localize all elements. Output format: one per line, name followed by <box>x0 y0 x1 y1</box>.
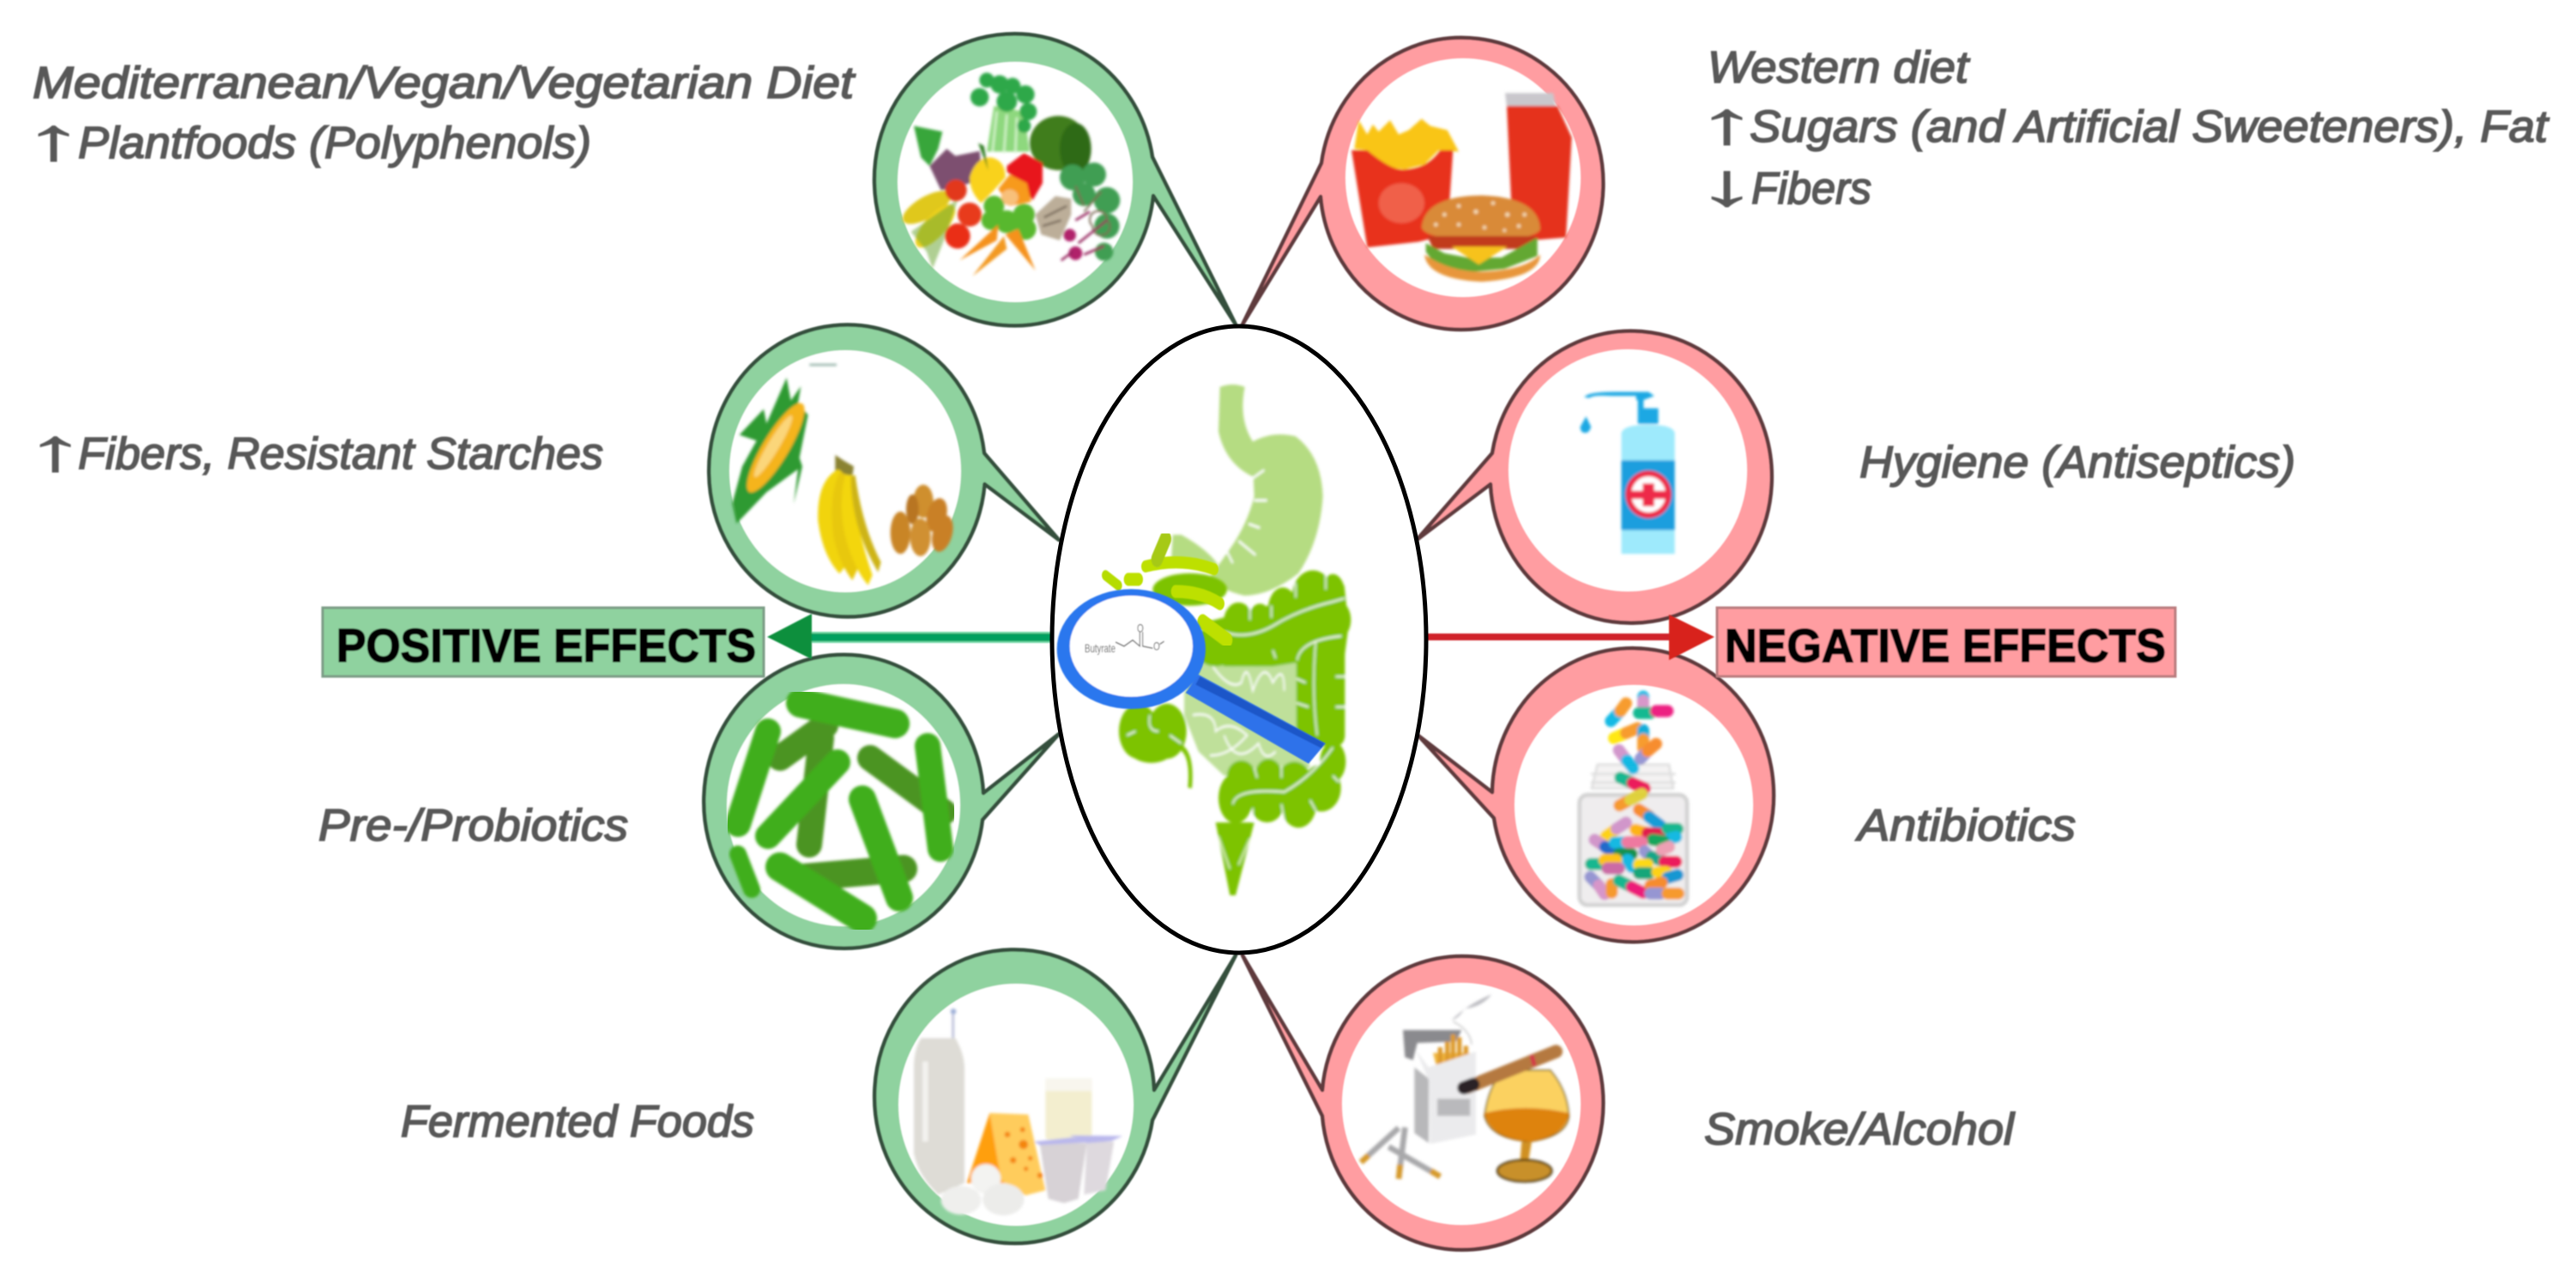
icon: vegetables <box>898 73 1120 276</box>
text: fibers and resistant starches: ↑ <box>24 416 87 483</box>
icon: intestines <box>1119 571 1351 895</box>
molecule: Butyrate <box>1085 641 1116 655</box>
icon: bacteria <box>738 703 944 918</box>
icon: pill bottle <box>1580 697 1687 905</box>
icon: corn, banana, potatoes <box>732 365 957 585</box>
icon: dairy foods <box>914 1009 1122 1215</box>
panel: probiotics callout <box>704 655 1059 949</box>
text: fibers and resistant starches: Fibers, Resistant Starches <box>78 429 603 479</box>
panel: antibiotics callout <box>1418 648 1774 942</box>
label box: negative effects: NEGATIVE EFFECTS <box>1725 619 2166 672</box>
panel: western diet callout <box>1243 38 1603 330</box>
text: western diet: Sugars (and Artificial Sweeteners), Fat <box>1750 102 2550 152</box>
panel: hygiene callout <box>1417 331 1772 623</box>
text: Mediterranean diet: Plantfoods (Polyphenols) <box>78 118 591 168</box>
icon: bacteria on gut <box>1105 539 1227 640</box>
arrow: positive effects <box>767 614 1055 659</box>
panel: smoke and alcohol callout <box>1243 955 1603 1250</box>
text: hygiene: Hygiene (Antiseptics) <box>1859 438 2295 488</box>
molecule: O <box>1137 621 1144 635</box>
panel: fibers callout <box>709 324 1059 616</box>
text: western diet <box>1696 43 2550 218</box>
panel: fermented foods callout <box>874 949 1236 1243</box>
icon: magnifying glass <box>1057 589 1326 764</box>
icon: antiseptic bottle <box>1581 391 1675 554</box>
text: Mediterranean diet <box>22 58 856 173</box>
arrow: negative effects <box>1424 615 1714 660</box>
text: western diet: Fibers <box>1751 164 1872 214</box>
text: antibiotics: Antibiotics <box>1855 801 2076 851</box>
molecule <box>1085 621 1164 655</box>
icon: stomach <box>1171 385 1323 596</box>
text: western diet: ↑ <box>1696 89 1758 156</box>
icon: cigarettes and brandy <box>1361 994 1569 1182</box>
icon: fast food <box>1351 93 1572 282</box>
text: Mediterranean diet: Mediterranean/Vegan/Vegetarian Diet <box>33 58 856 108</box>
text: fermented foods: Fermented Foods <box>401 1097 754 1147</box>
text: fibers and resistant starches <box>24 416 603 483</box>
text: western diet: ↓ <box>1696 151 1758 218</box>
panel: vegetables callout <box>874 33 1236 325</box>
text: western diet: Western diet <box>1708 43 1971 93</box>
text: Mediterranean diet: ↑ <box>22 106 85 173</box>
molecule: O <box>1153 640 1160 653</box>
label box: positive effects: POSITIVE EFFECTS <box>336 619 756 672</box>
text: smoke and alcohol: Smoke/Alcohol <box>1704 1105 2015 1155</box>
text: pre- and probiotics: Pre-/Probiotics <box>318 801 628 851</box>
central oval with digestive tract <box>1052 326 1426 953</box>
